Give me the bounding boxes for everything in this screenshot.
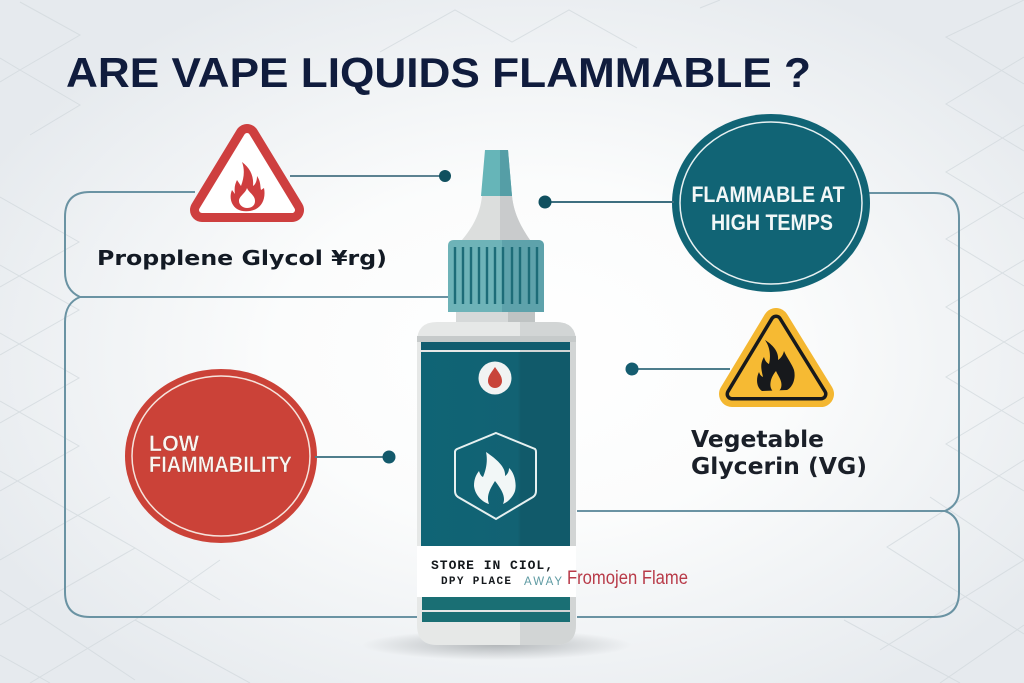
- badge: low flammability: [125, 369, 317, 543]
- bottle label: [417, 342, 576, 622]
- badge: flammable at high temps: FLAMMABLE AT: [692, 182, 845, 207]
- bottle body: [417, 322, 576, 645]
- bottle: [417, 150, 576, 645]
- label: propylene glycol: Propplene Glycol ¥rg): [97, 246, 387, 270]
- label text: away: AWAY: [524, 576, 562, 588]
- bottle tip: [481, 150, 512, 196]
- connector: low flammability dot: [315, 450, 396, 464]
- connector: propylene glycol dot: [290, 170, 451, 182]
- icon: shield flame: [455, 433, 536, 519]
- icon: red warning triangle: [202, 136, 292, 211]
- label text: from open flame: Fromojen Flame: [567, 568, 688, 589]
- icon: droplet badge: [478, 362, 512, 394]
- label: vegetable glycerin: [691, 427, 867, 480]
- badge: low flammability: LOW: [149, 431, 199, 456]
- connector: vegetable glycerin dot: [626, 362, 730, 376]
- connector: high temps dot: [538, 196, 674, 208]
- label: vegetable glycerin: Vegetable: [691, 427, 824, 453]
- title: ARE VAPE LIQUIDS FLAMMABLE ?: [66, 49, 811, 96]
- bottle shadow: [362, 630, 632, 660]
- badge: flammable at high temps: [672, 114, 870, 292]
- label text: storage: DPY PLACE: [441, 576, 511, 588]
- label: vegetable glycerin: Glycerin (VG): [691, 454, 867, 480]
- label text: storage: STORE IN CIOL,: [431, 558, 553, 573]
- badge: flammable at high temps: HIGH TEMPS: [711, 210, 833, 235]
- icon: yellow warning triangle: [732, 321, 821, 394]
- badge: low flammability: FIAMMABILITY: [149, 452, 292, 477]
- bottle neck: [462, 196, 530, 240]
- connector line frame: [65, 192, 959, 617]
- label text: storage: [431, 558, 553, 588]
- bottle cap: [448, 240, 544, 322]
